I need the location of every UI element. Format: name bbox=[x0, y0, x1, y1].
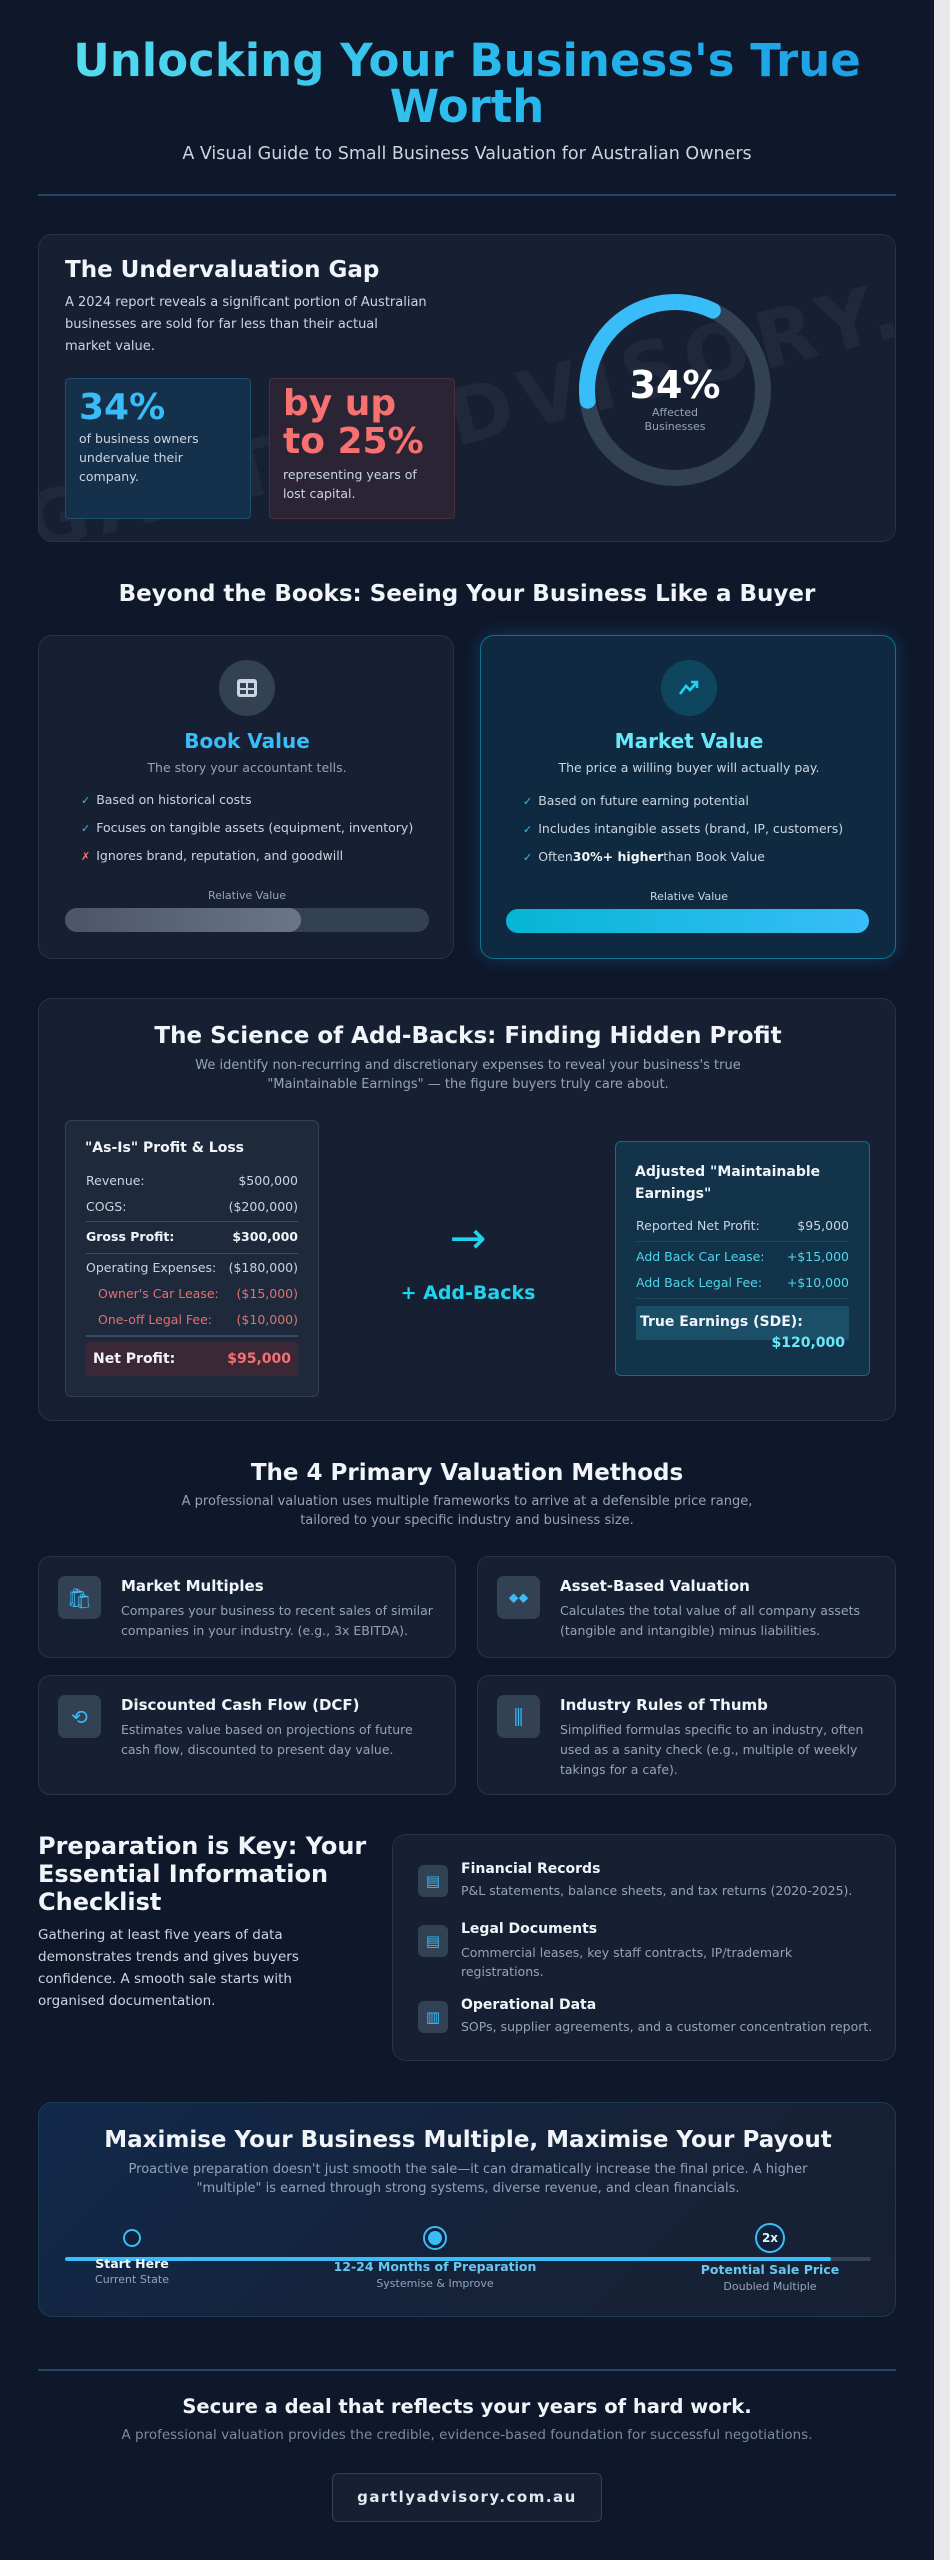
panel: book value: The story your accountant tells. bbox=[147, 760, 347, 775]
card: asset-based: Calculates the total value of all company assets (tangible and intangible) minus liabilities. bbox=[560, 1603, 860, 1638]
chart: donut 34%: 34% bbox=[630, 363, 720, 407]
item: financial records: P&L statements, balance sheets, and tax returns (2020-2025). bbox=[461, 1883, 852, 1898]
table: as-is P&L: $300,000 bbox=[232, 1229, 298, 1244]
subtitle: A Visual Guide to Small Business Valuation for Australian Owners bbox=[182, 144, 752, 164]
table: adjusted earnings: True Earnings (SDE): bbox=[640, 1314, 803, 1330]
button: website: gartlyadvisory.com.au bbox=[357, 2488, 577, 2506]
panel: add-backs: We identify non-recurring and discretionary expenses to reveal your business's true bbox=[195, 1058, 741, 1073]
table: as-is P&L: $500,000 bbox=[238, 1173, 298, 1188]
table: as-is P&L: One-off Legal Fee: bbox=[98, 1312, 212, 1327]
panel: market value: Relative Value bbox=[650, 890, 728, 903]
step: sale price: 2x bbox=[762, 2231, 778, 2245]
step: start: Start Here bbox=[95, 2256, 169, 2271]
table: adjusted earnings: Add Back Car Lease: bbox=[636, 1249, 765, 1264]
panel: market value: ✓ Often30%+ higherthan Book Value bbox=[523, 849, 765, 864]
heading: call to action: Secure a deal that reflects your years of hard work. bbox=[182, 2395, 752, 2418]
table: as-is P&L: $95,000 bbox=[227, 1351, 291, 1367]
step: start bbox=[95, 2229, 169, 2286]
card: market multiples: Compares your business to recent sales of similar companies in your industry. (e.g., 3x EBITDA). bbox=[121, 1603, 433, 1638]
table: adjusted earnings: $120,000 bbox=[771, 1335, 845, 1351]
text: preparation: Gathering at least five years of data demonstrates trends and gives buyers confidence. A smooth sale starts with organised documentation. bbox=[38, 1927, 299, 2009]
panel: book value: Relative Value bbox=[208, 889, 286, 902]
stat: 34%: 34% bbox=[79, 387, 165, 428]
heading: The Science of Add-Backs: Finding Hidden Profit bbox=[154, 1023, 782, 1049]
card: DCF bbox=[38, 1675, 456, 1795]
table: as-is P&L: ($180,000) bbox=[229, 1260, 298, 1275]
title: Worth bbox=[390, 80, 544, 133]
card title: Book Value bbox=[184, 729, 310, 753]
heading: beyond the books: Beyond the Books: Seeing Your Business Like a Buyer bbox=[119, 581, 815, 607]
table: adjusted earnings: +$15,000 bbox=[787, 1249, 849, 1264]
panel: book value bbox=[38, 635, 454, 959]
chart: donut 34%: Businesses bbox=[644, 420, 706, 433]
panel: market value: ✓ Includes intangible assets (brand, IP, customers) bbox=[523, 821, 843, 836]
card: DCF: Estimates value based on projections of future cash flow, discounted to present day value. bbox=[121, 1722, 413, 1757]
stat: by up to 25%: representing years of lost capital. bbox=[283, 467, 417, 501]
stat: 34%: of business owners undervalue their company. bbox=[79, 431, 199, 484]
table: as-is P&L: Revenue: bbox=[86, 1173, 145, 1188]
icon: trending up bbox=[661, 660, 717, 716]
timeline bbox=[65, 2223, 871, 2293]
label: add-backs: + Add-Backs bbox=[401, 1282, 535, 1304]
item: operational data: Operational Data bbox=[461, 1997, 596, 2013]
table: as-is P&L: COGS: bbox=[86, 1199, 126, 1214]
item: operational data bbox=[418, 1997, 872, 2034]
item: financial records bbox=[418, 1861, 852, 1898]
step: sale price bbox=[701, 2223, 839, 2293]
table: as-is P&L: "As-Is" Profit & Loss bbox=[85, 1140, 244, 1156]
table: adjusted earnings: Add Back Legal Fee: bbox=[636, 1275, 762, 1290]
panel: market value: The price a willing buyer will actually pay. bbox=[558, 760, 820, 775]
stat: by up to 25% bbox=[269, 378, 455, 519]
panel: maximise multiple: "multiple" is earned through strong systems, diverse revenue, and clean financials. bbox=[196, 2181, 740, 2196]
chart: donut 34% bbox=[579, 294, 771, 486]
panel: market value: Market Value bbox=[615, 729, 763, 753]
table: adjusted earnings: Adjusted "Maintainable Earnings" bbox=[635, 1164, 820, 1202]
panel: book value: ✗ Ignores brand, reputation, and goodwill bbox=[81, 848, 343, 863]
card: rules of thumb bbox=[477, 1675, 896, 1795]
card: market multiples: Market Multiples bbox=[121, 1577, 264, 1595]
step: sale price: Doubled Multiple bbox=[723, 2280, 817, 2293]
table: as-is P&L: Net Profit: bbox=[93, 1351, 175, 1367]
item: operational data: ▥ bbox=[426, 2008, 440, 2026]
heading: valuation methods: The 4 Primary Valuation Methods bbox=[251, 1460, 683, 1486]
step: start: Current State bbox=[95, 2273, 169, 2286]
stat: by up to 25%: to 25% bbox=[283, 421, 424, 462]
arrow: → bbox=[450, 1213, 486, 1264]
heading: Maximise Your Business Multiple, Maximise Your Payout bbox=[104, 2127, 832, 2153]
text: intro: A 2024 report reveals a significant portion of Australian businesses are sold for far less than their actual market value. bbox=[65, 295, 427, 354]
title bbox=[0, 38, 934, 130]
card: rules of thumb: ⫼ bbox=[514, 1704, 523, 1728]
table: adjusted earnings: Reported Net Profit: bbox=[636, 1218, 760, 1233]
item: legal documents bbox=[418, 1921, 792, 1979]
panel: book value: ✓ Focuses on tangible assets (equipment, inventory) bbox=[81, 820, 413, 835]
bar: book value bbox=[65, 908, 429, 932]
panel: add-backs bbox=[38, 998, 896, 1421]
chart: donut 34%: Affected bbox=[652, 406, 698, 419]
step: preparation: 12-24 Months of Preparation bbox=[334, 2259, 536, 2274]
card: rules of thumb: Industry Rules of Thumb bbox=[560, 1696, 768, 1714]
step: preparation bbox=[334, 2226, 536, 2290]
step: sale price: Potential Sale Price bbox=[701, 2262, 839, 2277]
card: DCF: Discounted Cash Flow (DCF) bbox=[121, 1696, 360, 1714]
item: financial records: ▤ bbox=[426, 1872, 440, 1890]
button: website bbox=[332, 2473, 602, 2522]
card: asset-based: ⬥⬥ bbox=[509, 1590, 528, 1606]
panel: market value bbox=[480, 635, 896, 959]
text: tailored to your specific industry and business size. bbox=[300, 1513, 634, 1528]
panel: add-backs: "Maintainable Earnings" — the figure buyers truly care about. bbox=[267, 1077, 669, 1092]
icon: table bbox=[219, 660, 275, 716]
table: as-is P&L bbox=[65, 1120, 319, 1397]
table: adjusted earnings bbox=[615, 1141, 870, 1376]
panel: maximise multiple: Proactive preparation doesn't just smooth the sale—it can dramatically increase the final price. A higher bbox=[129, 2162, 807, 2177]
step: preparation: Systemise & Improve bbox=[376, 2277, 494, 2290]
stat: by up to 25%: by up bbox=[283, 383, 396, 424]
heading: undervaluation gap: The Undervaluation Gap bbox=[65, 257, 379, 283]
panel: market value: ✓ Based on future earning potential bbox=[523, 793, 749, 808]
table: as-is P&L: Owner's Car Lease: bbox=[98, 1286, 219, 1301]
table: as-is P&L: ($15,000) bbox=[237, 1286, 298, 1301]
item: legal documents: Commercial leases, key staff contracts, IP/trademark registrations. bbox=[461, 1945, 792, 1979]
stat: 34% bbox=[65, 378, 251, 519]
table: as-is P&L: Gross Profit: bbox=[86, 1229, 174, 1244]
title: Unlocking Your Business's True bbox=[73, 34, 861, 87]
table: adjusted earnings: $95,000 bbox=[797, 1218, 849, 1233]
card: DCF: ⟲ bbox=[71, 1704, 88, 1728]
table: as-is P&L: ($200,000) bbox=[229, 1199, 298, 1214]
bar: market value bbox=[506, 909, 869, 933]
item: financial records: Financial Records bbox=[461, 1861, 600, 1877]
panel: checklist bbox=[392, 1834, 896, 2061]
item: legal documents: Legal Documents bbox=[461, 1921, 597, 1937]
text: A professional valuation provides the credible, evidence-based foundation for successful negotiations. bbox=[121, 2427, 813, 2443]
card: market multiples: 🛍 bbox=[67, 1586, 92, 1610]
card: asset-based bbox=[477, 1556, 896, 1658]
table: adjusted earnings: +$10,000 bbox=[787, 1275, 849, 1290]
table: as-is P&L: ($10,000) bbox=[237, 1312, 298, 1327]
item: operational data: SOPs, supplier agreements, and a customer concentration report. bbox=[461, 2019, 872, 2034]
table: as-is P&L: Operating Expenses: bbox=[86, 1260, 216, 1275]
text: A professional valuation uses multiple frameworks to arrive at a defensible price range, bbox=[182, 1494, 752, 1509]
card: rules of thumb: Simplified formulas specific to an industry, often used as a sanity check (e.g., multiple of weekly takings for a cafe). bbox=[560, 1722, 863, 1777]
card: market multiples bbox=[38, 1556, 456, 1658]
item: legal documents: ▤ bbox=[426, 1932, 440, 1950]
panel: maximise multiple bbox=[38, 2102, 896, 2317]
list: ✓ Based on historical costs bbox=[81, 792, 252, 807]
heading: preparation: Preparation is Key: Your Essential Information Checklist bbox=[38, 1832, 366, 1916]
card: asset-based: Asset-Based Valuation bbox=[560, 1577, 750, 1595]
